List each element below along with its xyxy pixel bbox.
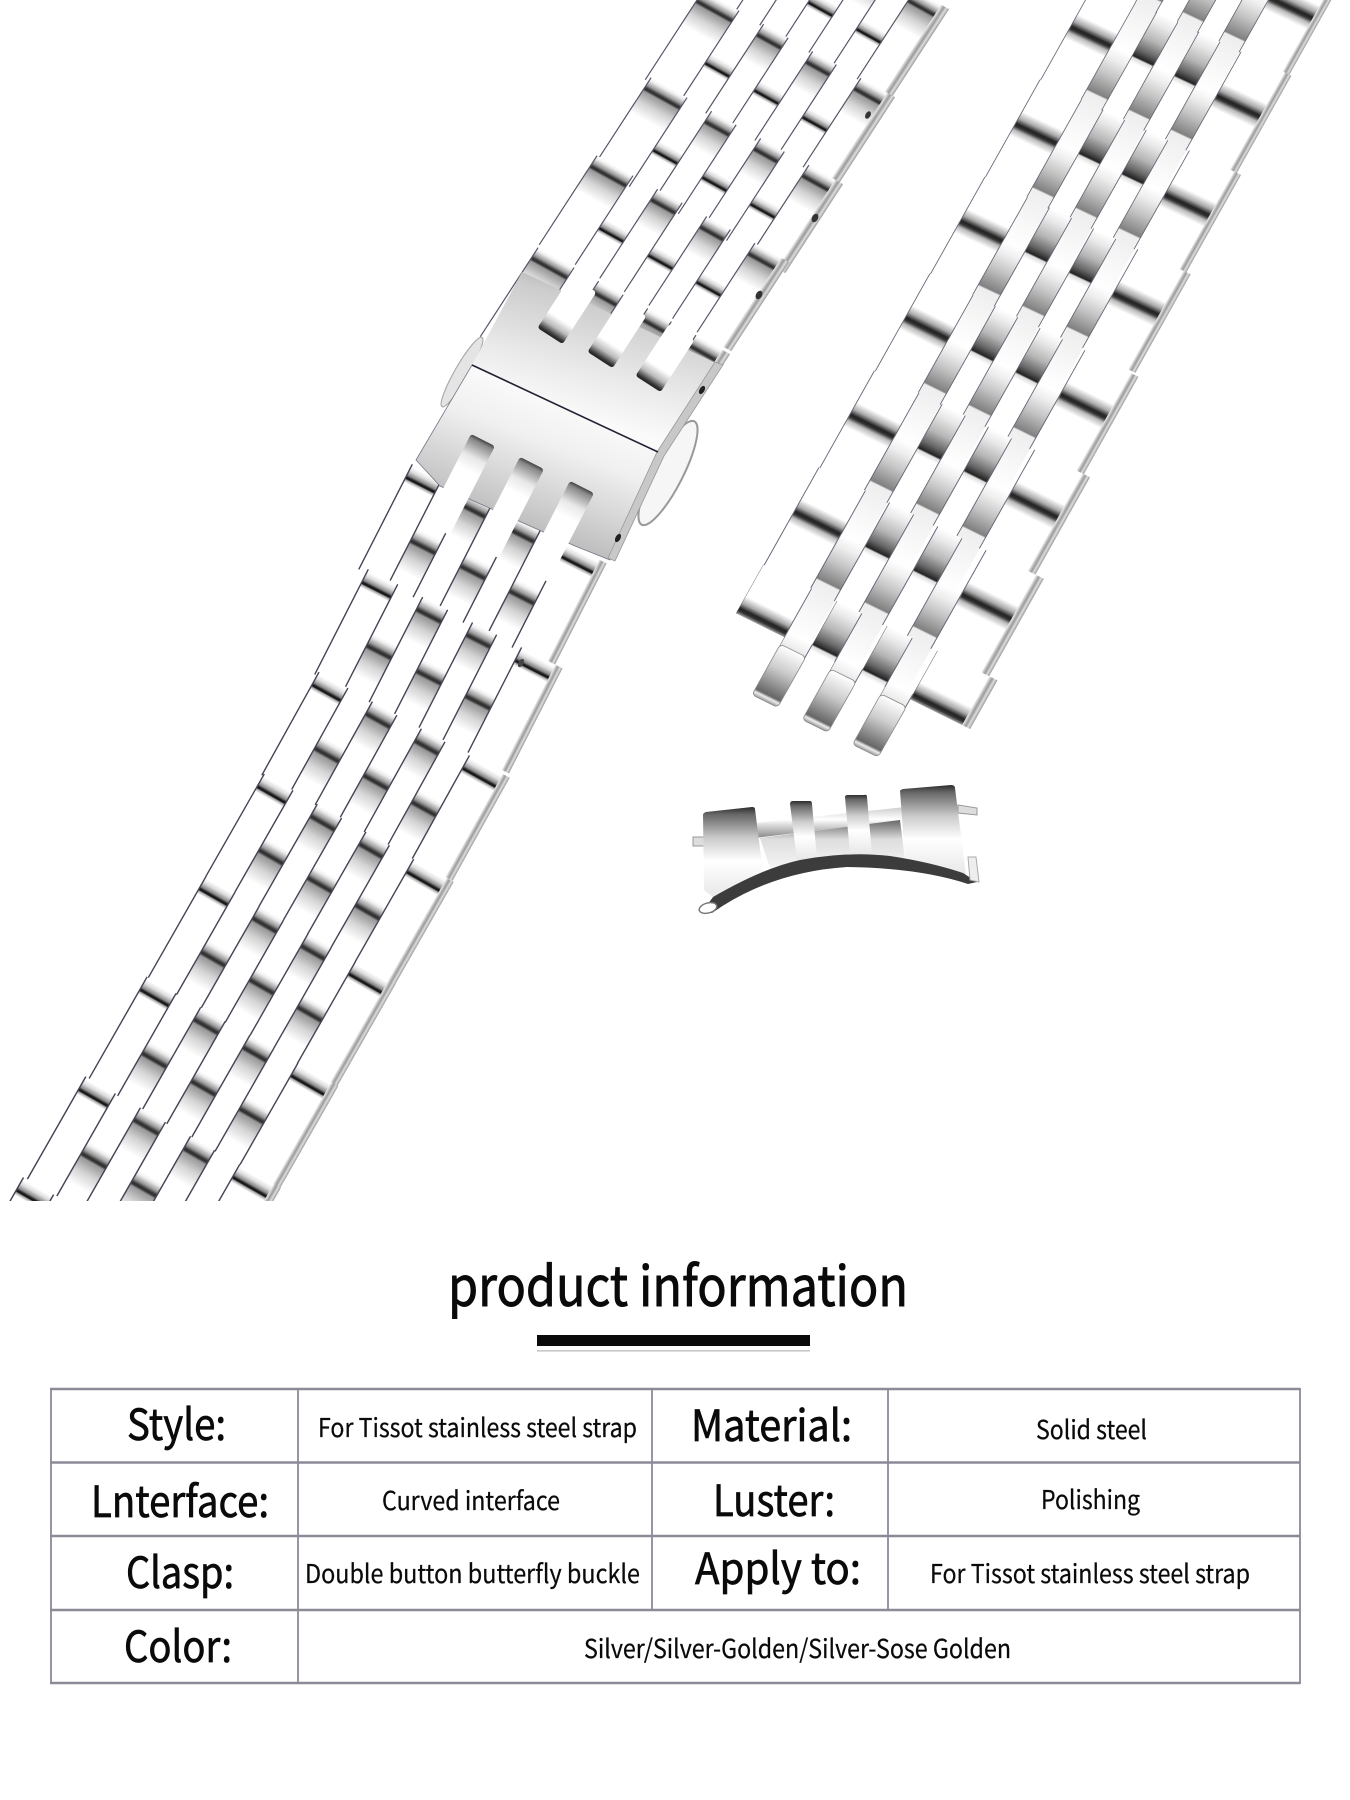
clasp upper plate [472, 272, 716, 452]
recessed body [760, 820, 905, 868]
curved underside [702, 854, 977, 913]
specification table [50, 1388, 1300, 1684]
inner tab 1 [790, 801, 817, 860]
clasp left button [436, 334, 488, 410]
row 3: clasp [126, 1535, 1250, 1601]
row 2: interface [91, 1467, 1140, 1530]
row 1: style: Solid steel [1036, 1410, 1147, 1447]
row 3: clasp: Apply to: [695, 1535, 861, 1597]
row 2: interface: Luster: [713, 1467, 835, 1529]
left block [703, 807, 763, 897]
clasp upper slots [537, 276, 694, 392]
row 4: color: Silver/Silver-Golden/Silver-Sose Golden [584, 1629, 1011, 1666]
spring bar ends [698, 901, 718, 915]
strap end tines [752, 644, 907, 757]
row 2: interface: Lnterface: [91, 1468, 269, 1530]
clasp lower plate [416, 365, 658, 560]
left strap: upper section [453, 0, 949, 485]
right block [900, 785, 966, 875]
inner tab 2 [845, 795, 872, 854]
row 1: style: Material: [691, 1392, 852, 1454]
table grid [50, 1388, 1300, 1684]
row 1: style [127, 1391, 1147, 1454]
clasp lower slots [426, 434, 594, 582]
clasp pin holes [614, 385, 706, 543]
clasp side faces [608, 362, 723, 561]
curved end link [693, 785, 979, 915]
pin between blocks [755, 807, 905, 838]
title underline [537, 1335, 810, 1352]
row 4: color: Color: [124, 1613, 232, 1675]
right strap section [736, 0, 1332, 756]
butterfly clasp [416, 272, 723, 582]
spring bar [693, 805, 977, 846]
clasp right button [628, 415, 708, 531]
left strap: lower section [9, 464, 606, 1201]
row 2: interface: Polishing [1041, 1480, 1140, 1517]
row 3: clasp: For Tissot stainless steel strap [930, 1554, 1250, 1591]
row 4: color [124, 1613, 1011, 1675]
row 3: clasp: Clasp: [126, 1539, 234, 1601]
row 3: clasp: Double button butterfly buckle [305, 1554, 640, 1591]
row 2: interface: Curved interface [382, 1481, 560, 1518]
clasp fold line [472, 365, 658, 452]
row 1: style: For Tissot stainless steel strap [318, 1408, 637, 1445]
title: product information [448, 1242, 908, 1322]
row 1: style: Style: [127, 1391, 226, 1453]
